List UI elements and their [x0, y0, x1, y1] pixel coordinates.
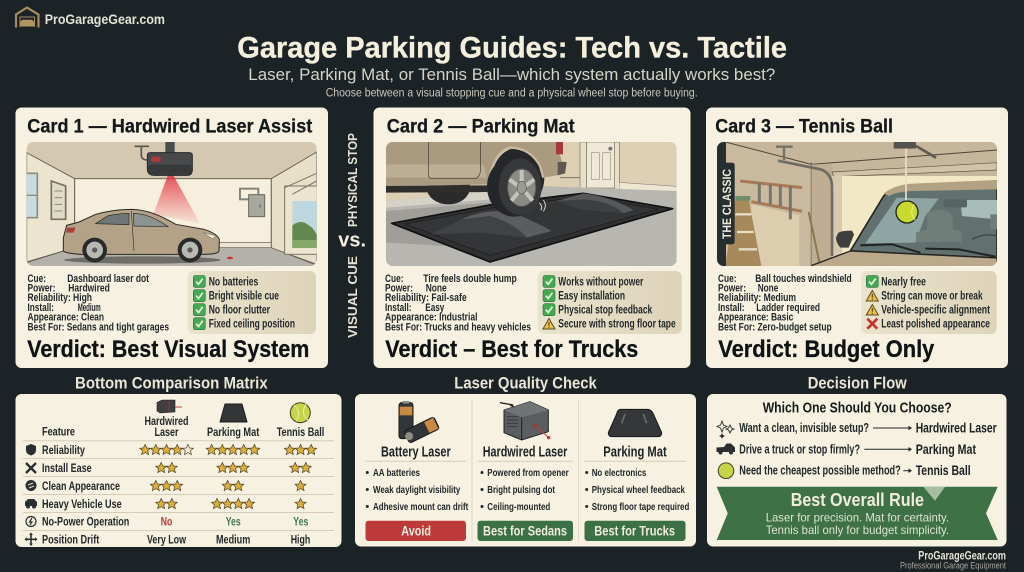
spec list: Best For: Sedans and tight garages: [28, 321, 169, 333]
footer brand: [900, 550, 1006, 571]
row: reliability: Reliability: [42, 443, 85, 457]
spec list: Reliability: High: [28, 292, 92, 304]
spec list: Easy: [425, 302, 445, 314]
panel: card 3 tennis ball: [706, 108, 1008, 368]
spec list: Best For: Zero-budget setup: [718, 321, 832, 333]
banner: best overall rule: [717, 487, 998, 540]
panel: comparison matrix table: [16, 394, 342, 547]
pros checklist: Fixed ceiling position: [209, 317, 295, 331]
illustration: truck tire on parking mat: [386, 142, 677, 266]
column: parking mat: [584, 409, 689, 541]
panel: laser quality check: [355, 394, 696, 546]
column: battery laser: [366, 401, 469, 541]
illustration: garage with ceiling laser and sedan: [25, 142, 318, 267]
spec list: Reliability: Fail-safe: [385, 292, 467, 304]
pros and cons checklist: Nearly free: [881, 274, 926, 288]
pros checklist: No floor clutter: [209, 303, 270, 317]
row: no-power operation: Yes: [226, 515, 241, 529]
badge text: THE CLASSIC: [722, 169, 734, 239]
heading: comparison matrix: Bottom Comparison Matrix: [75, 374, 268, 392]
row: install ease: [26, 461, 311, 475]
spec list: Install:: [718, 302, 744, 314]
card 1 heading: Card 1 — Hardwired Laser Assist: [27, 116, 313, 138]
icon: parking mat: [608, 409, 662, 437]
pros and cons checklist: [861, 271, 997, 334]
spec list: None: [426, 282, 447, 294]
title: Garage Parking Guides: Tech vs. Tactile: [237, 32, 787, 64]
decision row: ball: Tennis Ball: [916, 462, 971, 478]
spec list: Best For: Trucks and heavy vehicles: [385, 321, 531, 333]
decision heading: Which One Should You Choose?: [763, 400, 952, 416]
spec list: [28, 273, 169, 333]
column: parking mat: Strong floor tape required: [592, 501, 689, 513]
pros checklist: Physical stop feedback: [558, 303, 653, 317]
panel: decision flow: [707, 394, 1006, 546]
spec list: Cue:: [385, 273, 404, 285]
spec list: Cue:: [718, 273, 736, 285]
banner: best overall rule: Tennis ball only for budget simplicity.: [766, 523, 949, 537]
row: no-power operation: No: [161, 515, 172, 529]
column: battery laser: Weak daylight visibility: [373, 484, 460, 496]
row: position drift: Position Drift: [42, 533, 99, 547]
column: hardwired laser: [478, 402, 573, 541]
column: battery laser: Avoid: [401, 524, 431, 539]
column: battery laser: Battery Laser: [381, 445, 451, 461]
footer brand: Professional Garage Equipment: [900, 561, 1006, 571]
column: battery laser: Adhesive mount can drift: [373, 501, 469, 513]
column header: laser: [144, 400, 188, 439]
card 2 heading: Card 2 — Parking Mat: [387, 116, 575, 138]
verdict: Verdict – Best for Trucks: [385, 336, 638, 363]
spec list: Appearance: Industrial: [385, 312, 478, 324]
spec list: Hardwired: [68, 282, 110, 294]
card 3 heading: Card 3 — Tennis Ball: [715, 116, 893, 138]
versus divider: vs.: [338, 230, 366, 252]
column: hardwired laser: Ceiling-mounted: [487, 501, 550, 513]
column header: tennis ball: Tennis Ball: [277, 425, 324, 439]
decision row: laser: Hardwired Laser: [916, 420, 997, 436]
spec list: Install:: [28, 302, 54, 314]
row: no-power operation: No-Power Operation: [42, 515, 129, 529]
spec list: Power:: [385, 282, 413, 294]
decision row: ball: Need the cheapest possible method?: [739, 464, 901, 478]
decision row: laser: [717, 420, 997, 439]
illustration: tennis ball hanging at windshield: [717, 142, 997, 267]
spec list: Dashboard laser dot: [67, 273, 149, 285]
feature column heading: Feature: [42, 425, 75, 439]
spec list: [385, 273, 531, 333]
spec list: Install:: [385, 302, 412, 314]
spec list: Ladder required: [756, 302, 820, 314]
decision row: mat: Parking Mat: [916, 441, 976, 457]
spec list: Ball touches windshield: [755, 273, 852, 285]
badge: best for trucks: [584, 521, 686, 541]
row: position drift: Very Low: [147, 533, 186, 547]
pros checklist: Secure with strong floor tape: [558, 317, 676, 331]
row: install ease: Install Ease: [42, 461, 92, 475]
versus divider: [338, 133, 366, 338]
row: clean appearance: [26, 479, 306, 493]
column: parking mat: Parking Mat: [603, 445, 667, 461]
row: reliability: [26, 443, 317, 457]
spec list: Reliability: Medium: [718, 292, 796, 304]
row: position drift: Medium: [216, 533, 250, 547]
row: heavy vehicle use: Heavy Vehicle Use: [42, 497, 122, 511]
spec list: Power:: [28, 282, 56, 294]
supporting line: Choose between a visual stopping cue and a physical wheel stop before buying.: [326, 88, 698, 100]
spec list: None: [758, 282, 778, 294]
versus divider: VISUAL CUE: [345, 256, 360, 338]
pros and cons checklist: String can move or break: [881, 289, 983, 303]
row: heavy vehicle use: [25, 497, 306, 511]
panel: card 1 hardwired laser: [16, 108, 328, 368]
row: position drift: High: [291, 533, 310, 547]
column: parking mat: No electronics: [592, 467, 646, 479]
column: parking mat: Physical wheel feedback: [592, 484, 685, 496]
pros checklist: No batteries: [209, 274, 259, 288]
panel: card 2 parking mat: [374, 108, 690, 368]
decision row: laser: Want a clean, invisible setup?: [739, 421, 869, 435]
column header: laser: Laser: [154, 425, 179, 439]
spec list: Medium: [78, 302, 101, 314]
spec list: [718, 273, 852, 333]
column: hardwired laser: Bright pulsing dot: [487, 484, 555, 496]
badge: avoid: [366, 521, 466, 541]
row: no-power operation: Yes: [293, 515, 309, 529]
decision row: mat: [716, 441, 976, 457]
column header: laser: Hardwired: [144, 414, 188, 428]
banner: best overall rule: Laser for precision. Mat for certainty.: [766, 510, 949, 524]
row: position drift: [24, 532, 310, 547]
spec list: Cue:: [28, 273, 46, 285]
banner: best overall rule: Best Overall Rule: [791, 489, 924, 510]
spec list: Power:: [718, 282, 746, 294]
pros checklist: [188, 271, 316, 334]
verdict: Verdict: Best Visual System: [27, 336, 309, 363]
spec list: Tire feels double hump: [423, 273, 517, 285]
pros checklist: Easy installation: [558, 289, 625, 303]
column header: parking mat: [207, 404, 259, 439]
icon: AA batteries: [399, 401, 440, 444]
subtitle: Laser, Parking Mat, or Tennis Ball—which system actually works best?: [248, 65, 775, 84]
brand name: ProGarageGear.com: [45, 12, 165, 27]
mat surface: [392, 193, 673, 262]
badge: best for sedans: [478, 521, 573, 541]
pros checklist: Bright visible cue: [209, 289, 279, 303]
column: battery laser: AA batteries: [373, 467, 420, 479]
heading: decision flow: Decision Flow: [808, 374, 907, 392]
spec list: Appearance: Basic: [718, 312, 793, 324]
versus divider: PHYSICAL STOP: [345, 133, 360, 227]
column header: tennis ball: [277, 403, 324, 439]
icon: hardwired laser unit: [500, 402, 550, 440]
column: parking mat: Best for Trucks: [594, 524, 675, 539]
heading: laser quality check: Laser Quality Check: [454, 374, 597, 392]
column: hardwired laser: Powered from opener: [487, 467, 569, 479]
column header: parking mat: Parking Mat: [207, 425, 259, 439]
icon: garage with car: [16, 8, 38, 28]
column: hardwired laser: Hardwired Laser: [483, 445, 568, 461]
row: clean appearance: Clean Appearance: [42, 479, 120, 493]
decision row: mat: Drive a truck or stop firmly?: [739, 442, 860, 456]
pros checklist: Works without power: [558, 274, 644, 288]
header logo: [16, 8, 165, 28]
spec list: Appearance: Clean: [28, 312, 104, 324]
verdict: Verdict: Budget Only: [718, 336, 935, 363]
column: hardwired laser: Best for Sedans: [483, 524, 567, 539]
row: no-power operation: [26, 515, 309, 529]
pros checklist: [538, 271, 682, 334]
